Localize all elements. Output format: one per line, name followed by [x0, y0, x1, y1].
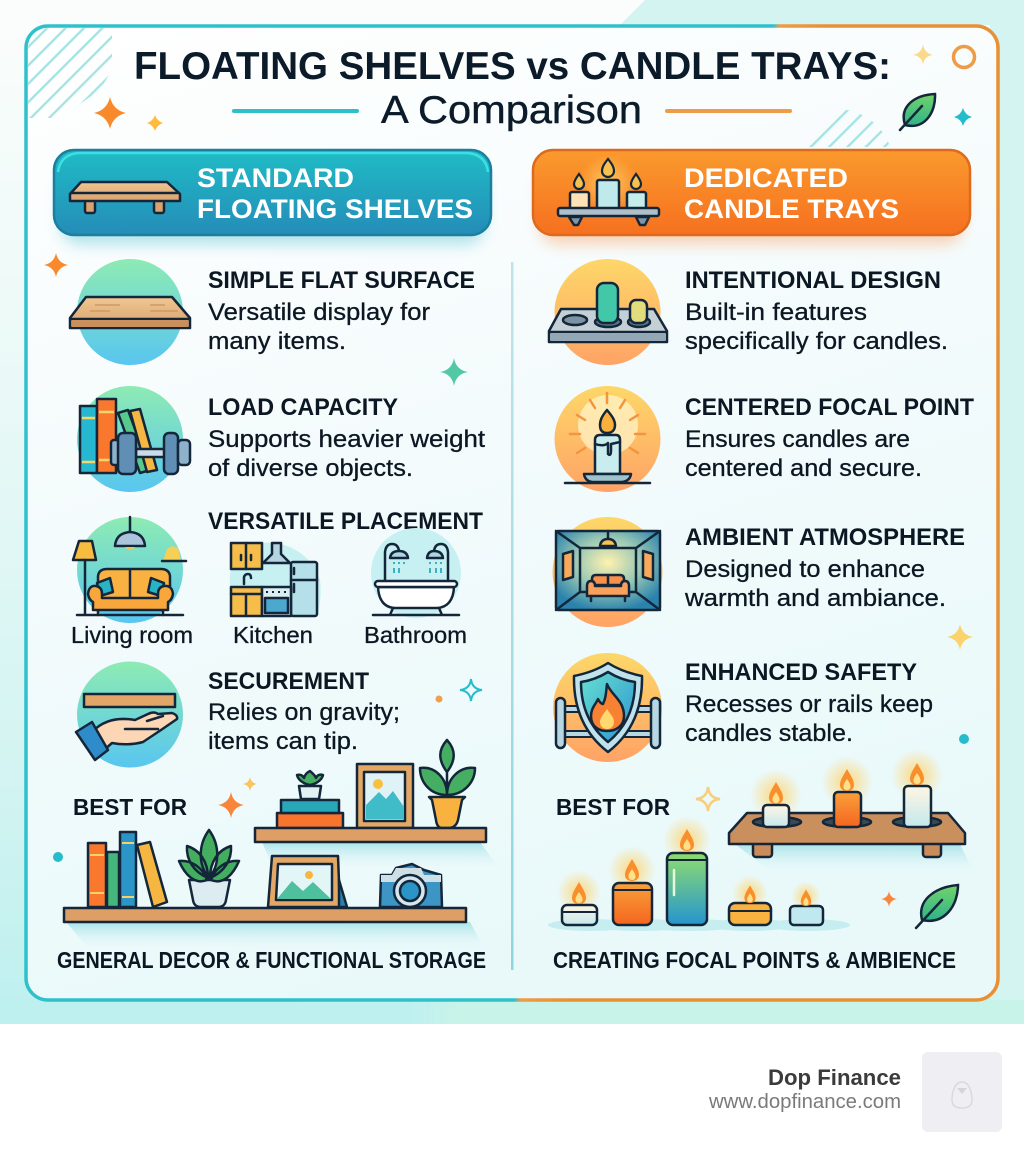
row: load capacity: Supports heavier weight — [208, 426, 485, 453]
row: simple flat surface — [70, 259, 475, 365]
upper shelf items — [277, 740, 475, 828]
icon: leaf — [916, 885, 958, 928]
row: simple flat surface: Versatile display for — [208, 299, 430, 326]
icon: flat shelf — [70, 259, 190, 365]
row: load capacity: LOAD CAPACITY — [208, 394, 398, 421]
row: centered focal point: Ensures candles are — [685, 426, 910, 453]
best for: floating shelves — [57, 740, 500, 973]
icon: lit room — [552, 517, 662, 627]
icon: glowing candle — [554, 386, 660, 492]
row: versatile placement — [71, 508, 483, 648]
decoration: hatch near leaf — [808, 110, 890, 147]
row: intentional design: specifically for candles. — [685, 328, 948, 355]
decoration: left column sparkles — [53, 358, 482, 862]
row: intentional design: INTENTIONAL DESIGN — [685, 267, 941, 294]
row: versatile placement: Living room — [71, 622, 193, 648]
best for: candle trays: BEST FOR — [556, 794, 670, 820]
best for: floating shelves: BEST FOR — [73, 794, 187, 820]
header: standard floating shelves — [54, 150, 491, 245]
row: securement — [76, 662, 400, 768]
row: simple flat surface: SIMPLE FLAT SURFACE — [208, 267, 475, 294]
illustration: shelves with decor — [64, 740, 500, 950]
footer logo tile — [922, 1052, 1002, 1132]
illustration: candle group — [548, 816, 850, 931]
title: FLOATING SHELVES vs CANDLE TRAYS: — [134, 45, 891, 88]
row: ambient atmosphere: Designed to enhance — [685, 556, 925, 583]
best for: candle trays — [548, 749, 975, 973]
icon: living room — [73, 517, 186, 623]
icon: shelf — [70, 182, 180, 213]
row: centered focal point: CENTERED FOCAL POINT — [685, 394, 974, 421]
row: enhanced safety: candles stable. — [685, 720, 853, 747]
title — [134, 45, 891, 132]
row: ambient atmosphere: AMBIENT ATMOSPHERE — [685, 524, 965, 551]
row: securement: Relies on gravity; — [208, 699, 400, 726]
illustration: candle tray — [729, 749, 975, 875]
best for: candle trays: CREATING FOCAL POINTS & AMBIENCE — [553, 947, 956, 973]
row: centered focal point: centered and secure. — [685, 455, 922, 482]
header: dedicated candle trays: CANDLE TRAYS — [684, 194, 899, 224]
title: A Comparison — [381, 89, 642, 132]
icon: bathtub — [371, 528, 461, 618]
decoration: hatch top left — [28, 28, 112, 118]
row: ambient atmosphere — [552, 517, 965, 627]
icon: books and dumbbell — [77, 386, 190, 492]
row: intentional design — [549, 259, 948, 365]
footer brand text: Dop Finance — [768, 1065, 901, 1090]
row: versatile placement: VERSATILE PLACEMENT — [208, 508, 483, 535]
decoration: sparkles and leaf at top — [44, 44, 974, 277]
lower shelf items — [88, 830, 442, 907]
icon: candles on tray — [558, 155, 659, 225]
row: ambient atmosphere: warmth and ambiance. — [684, 585, 946, 612]
footer brand text — [708, 1065, 901, 1113]
center divider — [511, 262, 514, 970]
row: load capacity — [77, 386, 485, 492]
row: load capacity: of diverse objects. — [208, 455, 413, 482]
header: standard floating shelves: FLOATING SHELVES — [197, 194, 473, 224]
icon: kitchen — [230, 543, 321, 616]
icon: hand under shelf — [76, 662, 183, 768]
row: versatile placement: Bathroom — [364, 622, 467, 648]
row: centered focal point — [554, 386, 974, 492]
row: simple flat surface: many items. — [208, 328, 346, 355]
icon: fire shield with rails — [553, 653, 662, 762]
row: enhanced safety: ENHANCED SAFETY — [685, 659, 917, 686]
header: standard floating shelves: STANDARD — [197, 163, 354, 193]
row: versatile placement: Kitchen — [233, 622, 313, 648]
row: securement: SECUREMENT — [208, 668, 369, 695]
best for: floating shelves: GENERAL DECOR & FUNCTIONAL STORAGE — [57, 947, 486, 973]
footer band — [0, 1024, 1024, 1154]
row: enhanced safety: Recesses or rails keep — [685, 691, 933, 718]
row: intentional design: Built-in features — [685, 299, 867, 326]
header: dedicated candle trays: DEDICATED — [684, 163, 848, 193]
footer brand text: www.dopfinance.com — [708, 1091, 901, 1113]
row: enhanced safety — [553, 653, 933, 762]
row: securement: items can tip. — [208, 728, 358, 755]
decoration: right column sparkles — [696, 624, 973, 907]
icon: tray with candles — [549, 259, 667, 365]
header: dedicated candle trays — [533, 150, 970, 245]
